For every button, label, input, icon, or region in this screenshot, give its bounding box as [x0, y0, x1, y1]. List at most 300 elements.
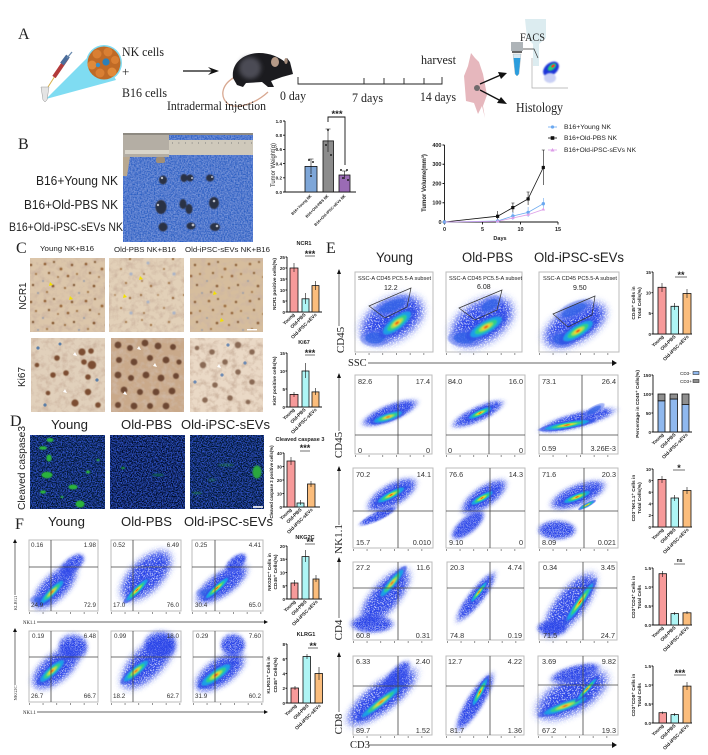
chart: NCR1 — [272, 241, 322, 341]
chart: CD3+CD4+ cells: 1.0 — [645, 585, 651, 590]
panel C: immunohistochemistry — [16, 240, 322, 436]
chart: KLRG1: CD45⁺ Cells(%) — [273, 657, 279, 693]
y-axis label: NKG2C⁺ Cells in — [267, 553, 273, 591]
chart: KLRG1: 4 — [282, 672, 285, 676]
flow plot E5 old-PBS: 1.36 — [508, 726, 522, 735]
flow plot E2 old-iPSC-sEVs: 0.59 — [542, 444, 556, 453]
chart: NKG2C — [267, 535, 322, 628]
flow plot F2 old-iPSC-sEVs: 7.60 — [249, 633, 261, 640]
panel letter F: F — [15, 516, 24, 533]
icon: cell circle — [86, 45, 122, 81]
chart: NCR1: 25 — [280, 255, 285, 260]
chart: CD45 cells: 15 — [646, 270, 651, 275]
chart: percentage stacked bars: Old-iPSC-sEVs — [661, 432, 690, 461]
chart: CD3+CD4+ cells — [631, 558, 692, 654]
flow plot E5 young: 89.7 — [356, 726, 370, 735]
flow plot E4 old-iPSC-sEVs — [536, 562, 617, 643]
panel letter D: D — [10, 413, 22, 430]
label: B16 cells: B16 cells — [122, 85, 167, 100]
panel letter C: C — [16, 240, 27, 257]
chart: tumor volume: 0 — [438, 220, 442, 226]
flow plot F1 young: 72.9 — [84, 602, 96, 609]
label: harvest: harvest — [421, 53, 456, 67]
chart: tumor volume: 0 — [443, 227, 446, 233]
chart: Ki67: 5 — [282, 387, 285, 392]
chart: cleaved caspase 3: Old-PBS — [285, 507, 304, 525]
column title Young: Young NK+B16 — [40, 244, 94, 253]
flow plot E5 young: 6.33 — [356, 657, 370, 666]
flow plot E2 old-iPSC-sEVs — [538, 375, 618, 456]
chart: NKG2C: 15 — [280, 557, 285, 562]
chart: KLRG1: Old-PBS — [292, 703, 311, 721]
legend: B16+Old-iPSC-sEVs NK — [564, 147, 637, 154]
flow plot E4 young: 60.8 — [356, 631, 370, 640]
chart: percentage stacked bars: 50 — [646, 411, 651, 416]
chart: percentage stacked bars: 150 — [643, 373, 651, 378]
arrow: to FACS — [480, 72, 507, 84]
flow plot E2 young — [355, 375, 432, 456]
timeline label 14 days: 14 days — [420, 90, 456, 104]
flow plot E1 old-PBS — [443, 272, 522, 356]
chart: CD3-NK1.1+ cells: Old-iPSC-sEVs — [662, 527, 691, 556]
column title Old-iPSC-sEVs: Old-iPSC-sEVs NK+B16 — [185, 245, 270, 254]
y-axis label: CD45⁺ Cells in — [631, 286, 637, 320]
flow plot F1 old-iPSC-sEVs: 0.25 — [195, 542, 208, 549]
y axis arrow CD8: CD8 — [333, 713, 345, 734]
flow plot E1 old-iPSC-sEVs: 9.50 — [573, 285, 587, 292]
chart: CD3-NK1.1+ cells: 10 — [646, 467, 651, 472]
flow plot F1 old-PBS: 6.49 — [167, 542, 179, 549]
bars — [287, 457, 315, 507]
chart: CD3+CD8+ cells: 0.0 — [645, 721, 651, 726]
legend: B16+Young NK — [564, 124, 612, 131]
flow plot E5 old-iPSC-sEVs: 19.3 — [602, 726, 616, 735]
arrow: to histology — [480, 90, 507, 104]
icon: FACS funnel — [525, 19, 546, 66]
y axis arrow CD4 — [333, 557, 345, 640]
x axis arrow SSC: SSC — [348, 358, 367, 369]
chart: NCR1: Young — [282, 312, 296, 327]
chart: CD45 cells: Total Cells(%) — [637, 287, 643, 319]
flow plot E4 young: 11.6 — [416, 563, 430, 572]
flow plot E4 old-PBS: 4.74 — [508, 563, 522, 572]
flow plot E5 young — [341, 656, 432, 737]
chart: CD3-NK1.1+ cells: 8 — [648, 478, 651, 484]
flow plot E4 old-PBS: 0.19 — [508, 631, 522, 640]
significance: ** — [677, 270, 685, 280]
icon: tube with cone of light — [41, 47, 116, 102]
row label Old-iPSC-sEVs: B16+Old-iPSC-sEVs NK — [9, 220, 123, 234]
chart: CD3+CD4+ cells: Total Cells — [637, 585, 643, 609]
flow plot F1 old-PBS: 17.0 — [113, 602, 126, 609]
flow plot E3 young — [353, 468, 433, 550]
flow plot F1 young — [27, 540, 98, 615]
tumors — [156, 174, 220, 232]
bars — [291, 654, 322, 703]
chart: cleaved caspase 3: 10 — [277, 492, 282, 496]
flow plot E3 old-PBS: 76.6 — [449, 470, 463, 479]
label: intradermal injection: Intradermal injection — [167, 98, 266, 113]
chart: CD45 cells: 0 — [648, 332, 651, 337]
chart: KLRG1: 0 — [282, 701, 285, 706]
significance: *** — [675, 668, 686, 678]
flow plot E5 old-iPSC-sEVs — [530, 656, 618, 737]
chart: NCR1: 20 — [280, 266, 285, 271]
chart: CD3+CD4+ cells: 0.0 — [645, 623, 651, 628]
y-axis label: CD3⁻NK1.1⁺ Cells in — [631, 475, 637, 521]
chart: CD45 cells: Young — [651, 334, 665, 349]
row label NCR1: NCR1 — [18, 282, 29, 310]
chart: Ki67: Old-PBS — [289, 407, 308, 425]
flow plot E3 old-iPSC-sEVs — [539, 468, 618, 550]
significance: *** — [305, 249, 316, 259]
flow plot F2 old-PBS: 18.2 — [113, 693, 126, 700]
chart: percentage stacked bars: 100 — [643, 392, 651, 397]
y axis arrow CD45 row 2: CD45 — [333, 431, 345, 458]
flow plot E5 old-iPSC-sEVs: 67.2 — [542, 726, 556, 735]
x axis arrow CD3 — [350, 740, 617, 751]
timeline label 7 days: 7 days — [352, 91, 383, 105]
column title Old-iPSC-sEVs: Old-iPSC-sEVs — [534, 250, 624, 265]
y axis arrow KLRG1 — [13, 539, 18, 610]
chart: KLRG1: 6 — [282, 657, 285, 662]
column title Old-PBS: Old-PBS — [121, 514, 172, 529]
chart: CD3-NK1.1+ cells: 4 — [648, 502, 651, 506]
panel E: immune cell flow cytometry — [326, 240, 699, 752]
chart: tumor volume — [421, 124, 637, 242]
chart: CD3+CD4+ cells: Old-iPSC-sEVs — [662, 625, 691, 654]
y axis arrow NKG2C: NKG2C — [13, 685, 18, 701]
icon: pink mouse — [464, 53, 487, 118]
row label: Cleaved caspase3 — [16, 426, 28, 510]
flow plot E1 young: SSC-A CD45 PC5.5-A subset — [358, 276, 431, 282]
flow plot F2 young: 26.7 — [31, 693, 44, 700]
chart: tumor weight: 0.0 — [276, 190, 282, 195]
flow plot E3 old-iPSC-sEVs: 20.3 — [602, 470, 616, 479]
icon: sample tube — [511, 42, 538, 76]
flow plot E4 young — [352, 562, 432, 642]
legend: B16+Old-PBS NK — [564, 135, 618, 142]
column title Young: Young — [376, 250, 413, 265]
flow plot F2 old-PBS: 0.99 — [114, 633, 127, 640]
bars — [290, 263, 319, 312]
y axis arrow NK1.1: NK1.1 — [333, 524, 345, 554]
flow plot F2 young — [26, 631, 98, 704]
flow plot E2 old-PBS: 0 — [448, 446, 452, 455]
chart: tumor weight: 0.6 — [276, 147, 282, 152]
stacked bars — [658, 394, 689, 432]
chart: tumor volume: 10 — [517, 227, 524, 233]
flow plot E2 old-PBS — [446, 375, 525, 456]
bars — [658, 283, 691, 334]
x axis arrow CD3: CD3 — [350, 740, 370, 751]
flow plot E4 old-PBS: 74.8 — [450, 631, 464, 640]
flow plot E3 old-PBS: 9.10 — [449, 538, 463, 547]
chart: NCR1: 10 — [280, 288, 285, 293]
flow plot E3 young: 0.010 — [413, 538, 431, 547]
flow plot E1 old-PBS: 6.08 — [477, 284, 491, 291]
flow plot F1 old-iPSC-sEVs: 65.0 — [249, 602, 261, 609]
significance: * — [677, 463, 681, 473]
chart: tumor weight: 0.8 — [276, 133, 282, 138]
flow plot E2 old-PBS: 0 — [519, 446, 523, 455]
flow plot E4 old-iPSC-sEVs: 24.7 — [601, 631, 615, 640]
column title Old-PBS: Old-PBS — [121, 417, 172, 432]
y axis arrow CD45 — [335, 269, 347, 353]
flow plot E1 young — [353, 272, 433, 354]
series: old PBS — [443, 150, 545, 224]
flow plot F1 young: 1.98 — [84, 542, 96, 549]
significance stars: *** — [331, 109, 343, 120]
chart: NKG2C: 20 — [280, 544, 285, 549]
bars — [659, 571, 691, 625]
arrow: to mouse — [183, 67, 219, 75]
flow plot E4 old-iPSC-sEVs: 0.34 — [543, 563, 557, 572]
column title Old-PBS: Old-PBS — [462, 250, 513, 265]
chart: cleaved caspase 3: 20 — [277, 478, 282, 483]
chart: Ki67: Old-iPSC-sEVs — [290, 407, 319, 436]
chart: percentage stacked bars — [635, 370, 699, 461]
panel A: experimental workflow — [18, 19, 568, 118]
flow plot F2 old-PBS: 62.7 — [167, 693, 179, 700]
flow plot E3 old-PBS: 0 — [519, 538, 523, 547]
flow plot F2 young: 6.48 — [84, 633, 96, 640]
chart: tumor volume: 400 — [432, 143, 442, 149]
label: Histology: Histology — [516, 101, 563, 116]
flow plot E5 old-PBS: 12.7 — [448, 657, 462, 666]
y-axis label: Percentage in CD45⁺ Cells(%) — [635, 370, 641, 438]
chart: cleaved caspase 3: Old-iPSC-sEVs — [286, 507, 315, 536]
chart: percentage stacked bars: Old-PBS — [659, 432, 678, 450]
flow plot E5 young: 2.40 — [416, 657, 430, 666]
column title Old-iPSC-sEVs: Old-iPSC-sEVs — [181, 417, 270, 432]
flow plot F2 old-PBS — [111, 628, 182, 704]
y-axis label: NCR1 positive cells(%) — [272, 258, 278, 310]
chart: CD45 cells: Old-iPSC-sEVs — [662, 334, 691, 363]
chart: KLRG1 — [266, 632, 323, 732]
y-axis label: CD3⁺CD4⁺ Cells in — [631, 576, 637, 618]
significance bracket — [328, 117, 345, 165]
chart: percentage stacked bars: 0 — [648, 430, 651, 435]
chart: tumor weight: B16+Old-PBS NK — [305, 194, 330, 219]
x axis arrow NK1.1: NK1.1 — [23, 621, 37, 626]
flow plot E3 young: 15.7 — [356, 538, 370, 547]
icon: mini flow plot — [532, 58, 568, 88]
flow plot E1 old-iPSC-sEVs — [538, 272, 619, 356]
image: NCR1 young — [30, 258, 105, 332]
chart: CD3+CD4+ cells: Old-PBS — [659, 625, 678, 643]
flow plot F1 old-PBS: 76.0 — [167, 602, 179, 609]
flow plot F1 old-PBS — [111, 540, 181, 613]
chart: tumor volume: 100 — [432, 200, 442, 206]
legend: CD3- — [680, 371, 691, 376]
chart: tumor volume: 15 — [555, 227, 561, 233]
chart: CD3+CD4+ cells: 0.5 — [645, 604, 651, 609]
flow plot E5 old-PBS — [446, 656, 524, 737]
flow plot F1 old-iPSC-sEVs: 30.4 — [195, 602, 208, 609]
flow plot F2 young: 0.19 — [32, 633, 45, 640]
flow plot E3 young: 70.2 — [356, 470, 370, 479]
x axis arrow NK1.1: NK1.1 — [23, 711, 37, 716]
chart: KLRG1: Young — [284, 703, 298, 718]
y-axis label: KLRG1⁺ Cells in — [266, 656, 272, 694]
flow plot E3 old-iPSC-sEVs: 71.6 — [542, 470, 556, 479]
chart: cleaved caspase 3 — [269, 437, 324, 536]
flow plot E1 old-PBS: SSC-A CD45 PC5.5-A subset — [449, 276, 522, 282]
flow plot E4 old-iPSC-sEVs: 71.5 — [543, 631, 557, 640]
flow plot F2 old-iPSC-sEVs: 60.2 — [249, 693, 261, 700]
plus sign: + — [122, 64, 129, 79]
bars — [305, 129, 350, 192]
chart: NKG2C: 0 — [282, 597, 285, 602]
flow plot E4 old-iPSC-sEVs: 3.45 — [601, 563, 615, 572]
row label Old-PBS: B16+Old-PBS NK — [24, 197, 118, 212]
chart: percentage stacked bars: Young — [651, 432, 665, 447]
flow plot E2 old-iPSC-sEVs: 26.4 — [602, 377, 616, 386]
icon: mouse — [223, 53, 293, 106]
bars — [290, 363, 319, 407]
flow plot E2 old-PBS: 16.0 — [509, 377, 523, 386]
y-axis label: CD3⁺CD8⁺ Cells in — [631, 674, 637, 716]
chart: cleaved caspase 3: Young — [279, 507, 293, 522]
chart: NCR1: Old-PBS — [289, 312, 308, 330]
chart: KLRG1: 8 — [282, 642, 285, 647]
x axis arrow NK1.1 — [23, 620, 268, 626]
chart: CD3-NK1.1+ cells: Young — [651, 527, 665, 542]
flow plot E5 old-PBS: 81.7 — [450, 726, 464, 735]
label: FACS: FACS — [520, 30, 545, 44]
flow plot E2 young: 17.4 — [416, 377, 430, 386]
y axis arrow NK1.1 — [333, 466, 345, 554]
chart: NKG2C: Old-iPSC-sEVs — [291, 599, 320, 628]
series: young — [443, 198, 545, 224]
icon: syringe — [48, 52, 72, 87]
flow plot E4 young: 0.31 — [416, 631, 430, 640]
chart: tumor volume: 300 — [432, 162, 442, 168]
panel letter A: A — [18, 26, 30, 43]
chart: CD45 cells — [631, 270, 692, 363]
chart: CD3+CD8+ cells: 1.0 — [645, 683, 651, 688]
flow plot E2 old-iPSC-sEVs: 3.26E-3 — [590, 444, 616, 453]
chart: CD3+CD8+ cells: 0.5 — [645, 702, 651, 707]
flow plot F2 old-iPSC-sEVs: 31.9 — [195, 693, 208, 700]
chart: CD3+CD8+ cells: Old-iPSC-sEVs — [662, 723, 691, 752]
chart: cleaved caspase 3: 40 — [277, 451, 282, 456]
chart: CD45 cells: Old-PBS — [659, 334, 678, 352]
image: Ki67 young — [31, 338, 105, 412]
chart: NCR1: 15 — [280, 277, 285, 282]
flow plot F1 old-iPSC-sEVs: 4.41 — [249, 542, 261, 549]
flow plot E5 old-iPSC-sEVs: 9.82 — [602, 657, 616, 666]
significance: ns — [677, 558, 683, 564]
flow plot E1 young: 12.2 — [384, 285, 398, 292]
chart: tumor weight: B16+Old-iPSC-sEVs NK — [314, 194, 347, 227]
image: NCR1 old-iPSC-sEVs — [190, 258, 263, 332]
chart: Ki67: Young — [282, 407, 296, 422]
chart: NKG2C: 5 — [282, 584, 285, 589]
image: IF old-iPSC-sEVs — [190, 435, 264, 509]
panel D: cleaved caspase 3 — [10, 413, 324, 536]
chart: CD3+CD4+ cells: Young — [651, 625, 665, 640]
chart: tumor volume: 5 — [481, 227, 484, 233]
flow plot E2 old-PBS: 84.0 — [448, 377, 462, 386]
chart: cleaved caspase 3: 30 — [277, 464, 282, 470]
chart title: NKG2C — [295, 535, 315, 541]
chart: CD3+CD8+ cells — [631, 664, 692, 752]
row label Ki67: Ki67 — [17, 367, 28, 387]
chart: NKG2C: CD45⁺ Cells(%) — [273, 554, 279, 590]
chart: CD3-NK1.1+ cells — [631, 463, 692, 556]
image: IF old-PBS — [110, 435, 185, 509]
panel F: NK cell flow cytometry — [13, 514, 323, 732]
chart: CD3+CD4+ cells: 1.5 — [645, 566, 651, 571]
y axis arrow CD45: CD45 — [335, 326, 347, 353]
x axis arrow NK1.1 — [23, 710, 268, 716]
chart: CD3+CD8+ cells: Total Cells — [637, 683, 643, 707]
chart: Ki67: 0 — [282, 405, 285, 410]
chart: KLRG1: Old-iPSC-sEVs — [294, 703, 323, 732]
flow plot E3 old-iPSC-sEVs: 8.09 — [542, 538, 556, 547]
y-axis label: Ki67 positive cells(%) — [272, 356, 278, 406]
chart: CD45 cells: 5 — [648, 311, 651, 316]
chart: Ki67: 10 — [280, 369, 285, 374]
legend — [548, 124, 637, 154]
flow plot E2 old-iPSC-sEVs: 73.1 — [542, 377, 556, 386]
flow plot E5 old-PBS: 4.22 — [508, 657, 522, 666]
flow plot F1 old-iPSC-sEVs — [192, 540, 263, 613]
column title Old-PBS: Old-PBS NK+B16 — [114, 245, 176, 254]
y-axis label: Cleaved caspase 3 positive cells(%) — [269, 445, 274, 519]
significance: *** — [300, 443, 311, 453]
chart: tumor weight: 0.2 — [276, 176, 282, 180]
row label Young: B16+Young NK — [36, 173, 118, 188]
flow plot E4 old-PBS — [447, 562, 524, 642]
chart: NKG2C: Old-PBS — [290, 599, 309, 617]
significance: ** — [309, 641, 317, 651]
flow plot F2 young: 66.7 — [84, 693, 96, 700]
chart: CD3+CD8+ cells: 1.5 — [645, 664, 651, 669]
flow plot F1 young: 0.16 — [31, 542, 44, 549]
panel letter B: B — [18, 136, 29, 153]
chart: tumor volume: 200 — [432, 182, 442, 188]
flow plot E2 young: 82.6 — [358, 377, 372, 386]
chart: NCR1: Old-iPSC-sEVs — [290, 312, 319, 341]
chart: cleaved caspase 3: 0 — [279, 505, 282, 510]
chart title: NCR1 — [297, 241, 311, 247]
flow plot E2 young: 0 — [358, 446, 362, 455]
x-axis label: Days — [493, 236, 507, 242]
image: Ki67 old-PBS — [111, 338, 184, 412]
chart: KLRG1: 2 — [282, 686, 285, 691]
chart: tumor weight: 1.0 — [276, 119, 282, 124]
photo: tumors and caliper — [123, 133, 253, 242]
y axis arrow CD45 row 2 — [333, 373, 345, 458]
chart: NCR1: 5 — [282, 299, 285, 304]
flow plot F1 old-PBS: 0.52 — [113, 542, 126, 549]
flow plot F2 old-PBS: 18.0 — [167, 633, 179, 640]
chart: CD45 cells: 10 — [646, 290, 651, 296]
y axis arrow CD8 — [333, 652, 345, 734]
legend — [680, 371, 699, 384]
bars — [291, 550, 319, 599]
chart title: KLRG1 — [297, 632, 315, 638]
panel B: tumor size and growth — [9, 109, 637, 242]
significance: ** — [306, 537, 314, 547]
y-axis label: Tumor Weight(g) — [270, 143, 277, 187]
chart: Ki67 — [272, 340, 322, 436]
y axis arrow NKG2C — [13, 628, 18, 701]
image: NCR1 old-PBS — [109, 258, 184, 332]
